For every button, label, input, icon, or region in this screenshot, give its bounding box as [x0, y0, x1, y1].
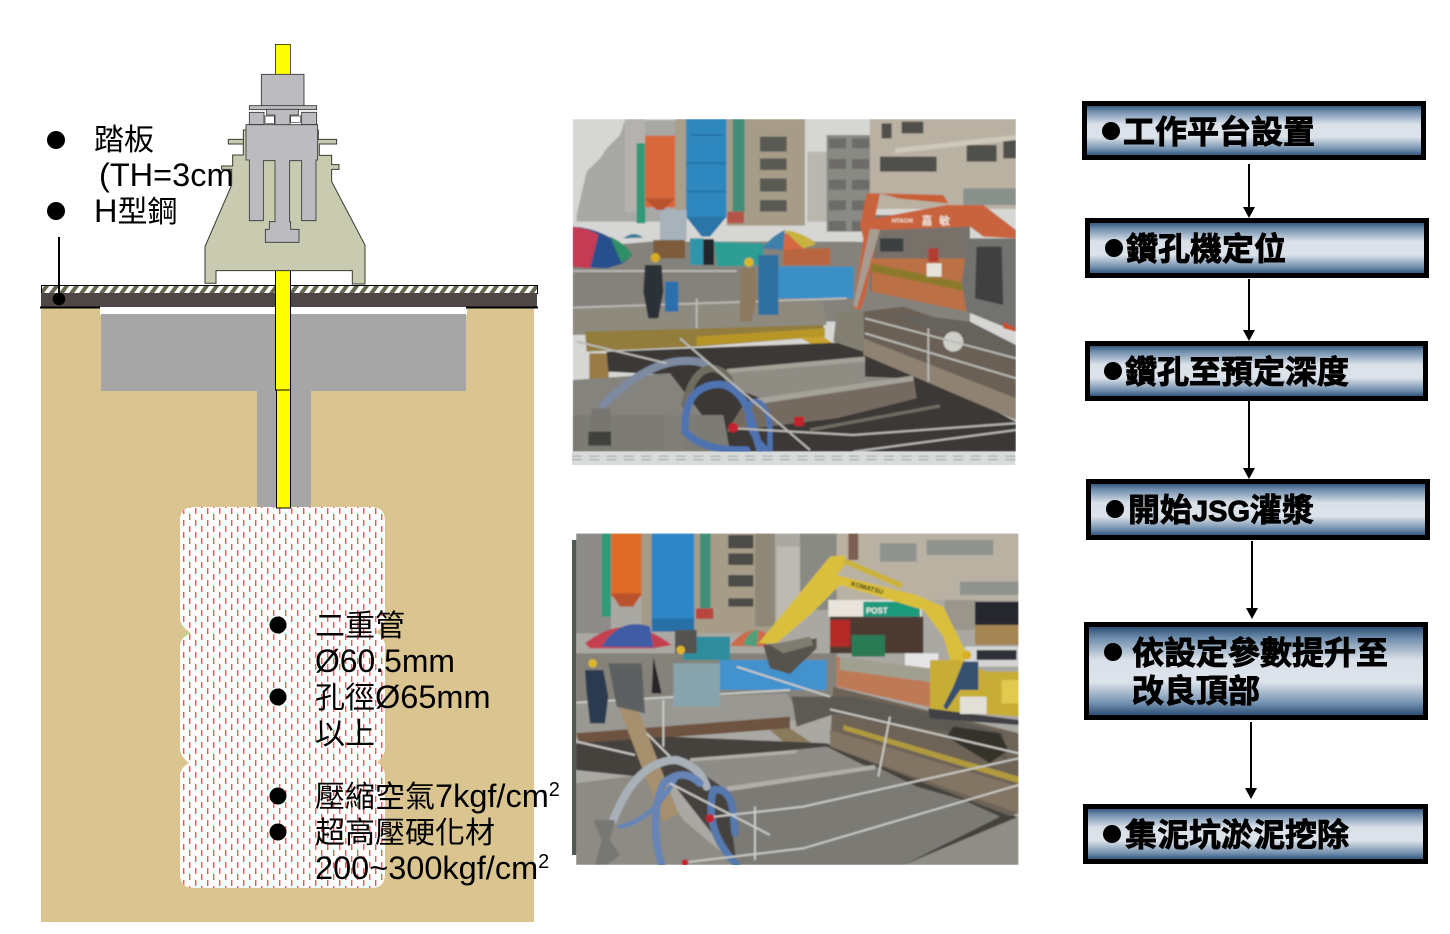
excavated white gap [100, 307, 467, 315]
platform [573, 302, 827, 335]
ground front left [572, 372, 702, 416]
step 5: lift to top of improvement: 依設定參數提升至 [1132, 635, 1388, 671]
step 5: lift to top of improvement: 改良頂部 [1132, 673, 1260, 709]
machine head [246, 74, 318, 242]
railings [576, 667, 1019, 863]
photo: excavator removing slurry from pit: POST [866, 607, 888, 616]
label: steel plate text [47, 124, 234, 193]
grey excavated pit [101, 314, 466, 391]
step 3: drill to depth: 鑽孔至預定深度 [1125, 354, 1349, 390]
step 2: drill positioning [1088, 220, 1426, 276]
arrow 1 [1243, 164, 1255, 218]
umbrellas [573, 227, 633, 268]
leader line to platform [53, 237, 65, 305]
label: compressed air: 壓縮空氣7kgf/cm [315, 778, 549, 814]
step 1: work platform [1084, 104, 1424, 158]
label: H-beam text: H型鋼 [94, 193, 177, 229]
photo: excavator removing slurry from pit [572, 530, 1019, 866]
pit [607, 342, 1016, 452]
step 2: drill positioning: 鑽孔機定位 [1126, 231, 1286, 267]
step 3: drill to depth [1088, 344, 1426, 398]
step 6: slurry pit excavation [1086, 806, 1426, 862]
label: ultra-high pressure hardener: 超高壓硬化材 [315, 817, 495, 850]
step 1: work platform: 工作平台設置 [1123, 114, 1315, 150]
label: ultra-high pressure hardener [270, 817, 549, 886]
yellow grout rod [276, 270, 290, 508]
working platform [40, 286, 538, 308]
shops [828, 600, 922, 617]
step 6: slurry pit excavation: 集泥坑淤泥挖除 [1125, 817, 1349, 853]
drilling machine [205, 44, 365, 284]
machine base [205, 130, 365, 284]
label: ultra-high pressure hardener: 200~300kgf/cm [315, 850, 538, 886]
label: double tube: Ø60.5mm [315, 643, 455, 679]
step 4: start JSG grouting: 開始JSG灌漿 [1128, 492, 1314, 528]
workers and rig [643, 265, 663, 318]
ground front left [576, 773, 737, 865]
workers and rig [585, 670, 608, 723]
mid site [576, 653, 837, 707]
label: hole diameter [270, 679, 491, 751]
hoses [603, 361, 770, 450]
pumps [592, 408, 610, 416]
label: double tube [270, 610, 455, 679]
machine rod top [275, 44, 290, 76]
soil ground [41, 307, 534, 922]
photo: drilling at site with orange excavator: 嘉 [922, 214, 933, 227]
photo: drilling at site with orange excavator: HITACHI [892, 218, 913, 224]
arrow 5 [1245, 722, 1257, 799]
label: hole diameter: 以上 [315, 718, 375, 751]
hoses [613, 760, 737, 865]
arrow 3 [1243, 401, 1255, 479]
railings [573, 271, 1016, 452]
right deck [830, 687, 1019, 816]
right deck [862, 306, 1016, 399]
panel: process flowchart [1084, 104, 1428, 862]
excavator [853, 193, 1016, 310]
label: compressed air: 2 [549, 779, 560, 801]
step 4: start JSG grouting [1088, 482, 1428, 538]
label: steel plate text: (TH=3cm [99, 157, 234, 193]
photo: drilling at site with orange excavator [572, 119, 1016, 465]
label: H-beam text [47, 193, 177, 229]
panel: ground section diagram [40, 44, 560, 922]
improved soil column [180, 507, 385, 888]
label: steel plate text: 踏板 [94, 124, 154, 157]
ground far [573, 242, 970, 322]
excavator [758, 554, 966, 662]
pit [576, 737, 1017, 865]
arrow 4 [1246, 541, 1258, 619]
photo: drilling at site with orange excavator: 敏 [939, 214, 950, 227]
grey borehole shaft [257, 391, 311, 509]
shop behind excavator [870, 214, 971, 292]
umbrellas [585, 627, 672, 648]
arrow 2 [1243, 279, 1255, 341]
step 5: lift to top of improvement [1086, 624, 1426, 718]
label: double tube: 二重管 [315, 610, 405, 643]
label: ultra-high pressure hardener: 2 [538, 851, 549, 873]
platform [576, 693, 803, 733]
photo: excavator removing slurry from pit: KOMATSU [850, 581, 884, 596]
label: hole diameter: 孔徑Ø65mm [315, 679, 491, 715]
